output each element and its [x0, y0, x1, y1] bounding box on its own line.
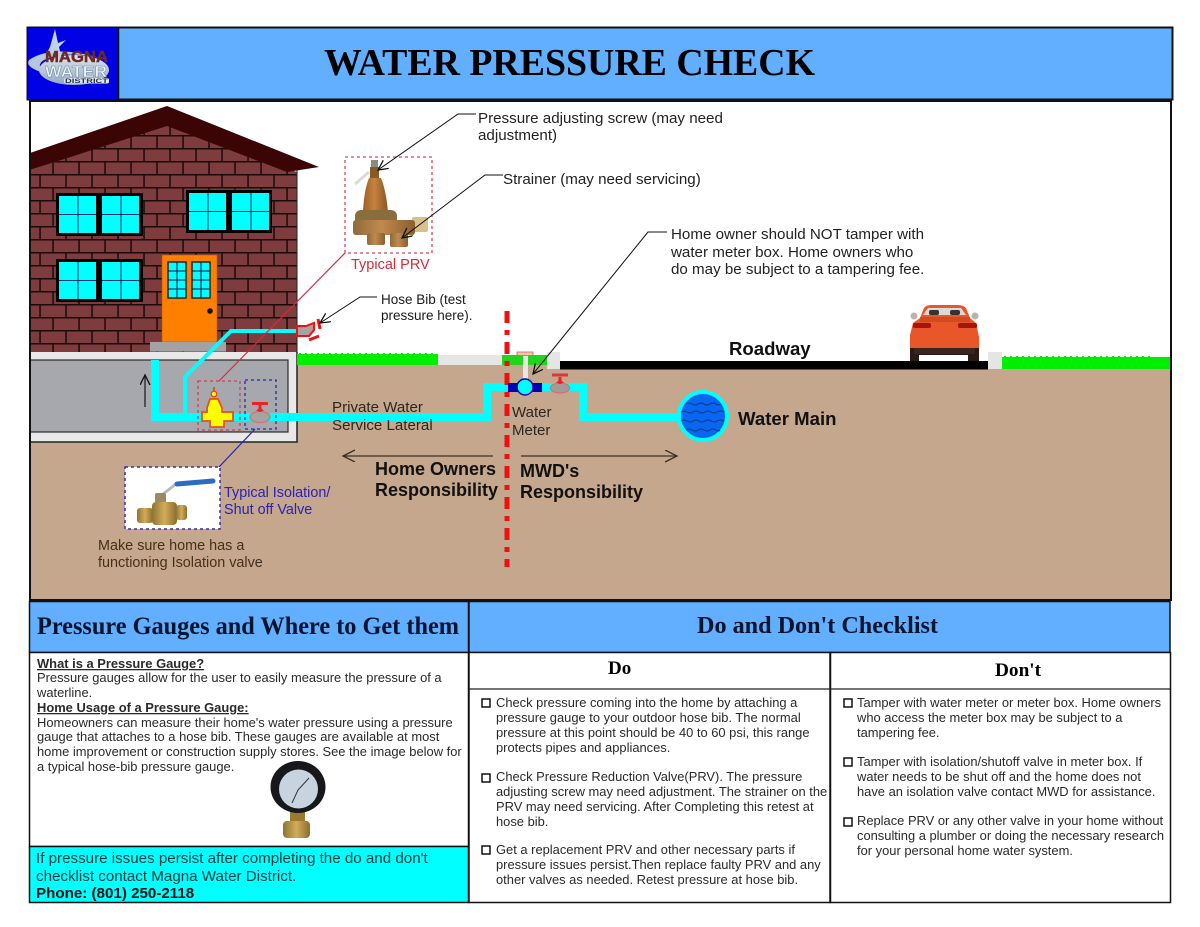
- text block: what is a gauge: What is a Pressure Gauge?: [37, 656, 204, 671]
- logo: WATER: [45, 64, 107, 81]
- roadway: [560, 361, 988, 370]
- label: water meter: Meter: [512, 422, 550, 439]
- column: do: [469, 652, 830, 902]
- callout: do not tamper: [533, 226, 924, 374]
- label: private water service lateral: Service Lateral: [332, 417, 433, 434]
- don't item 3: for your personal home water system.: [857, 843, 1073, 858]
- label: private water service lateral: [332, 399, 433, 434]
- callout: strainer: [402, 171, 701, 238]
- hose bib: [297, 319, 320, 340]
- door step: [150, 342, 226, 352]
- panel: pressure gauges: [30, 602, 468, 902]
- label: water meter: [512, 404, 551, 439]
- window lower left: [56, 259, 143, 302]
- checklist item 2: PRV may need servicing. After Completing this retest at: [496, 799, 814, 814]
- callout: hose bib: pressure here).: [381, 308, 473, 323]
- valve photo: [353, 160, 428, 247]
- logo: [28, 28, 119, 99]
- checklist item 1: [482, 695, 810, 755]
- title: WATER PRESSURE CHECK: [324, 42, 815, 84]
- don't item 3: Replace PRV or any other valve in your home without: [857, 813, 1164, 828]
- PRV photo panel: [345, 157, 432, 273]
- basement: [30, 352, 297, 442]
- text block: what is a gauge: Pressure gauges allow for the user to easily measure the pressure of a: [37, 670, 442, 685]
- column: do: Do: [608, 658, 631, 679]
- callout: contact: [30, 846, 468, 902]
- don't item 2: water needs to be shut off and the home does not: [856, 769, 1141, 784]
- icon: isolation valve symbol: [250, 402, 270, 422]
- label: MWD responsibility: MWD's: [520, 461, 579, 481]
- grass and curb right: [988, 352, 1170, 369]
- don't item 3: [844, 813, 1164, 858]
- callout: hose bib: [320, 292, 473, 323]
- don't item 2: have an isolation valve contact MWD for assistance.: [857, 784, 1155, 799]
- don't item 1: tampering fee.: [857, 725, 940, 740]
- PRV label: Typical PRV: [351, 257, 430, 273]
- callout: adjusting screw: Pressure adjusting screw (may need: [478, 110, 723, 127]
- callout: contact: Phone: (801) 250-2118: [36, 885, 194, 902]
- don't item 3: consulting a plumber or doing the necessary research: [857, 828, 1164, 843]
- checklist item 3: [482, 842, 821, 887]
- grass and sidewalk left of meter: [297, 352, 560, 369]
- checklist item 1: protects pipes and appliances.: [496, 740, 670, 755]
- isolation valve label: [224, 485, 330, 518]
- door: [162, 255, 217, 342]
- don't item 2: [844, 754, 1155, 799]
- callout: do not tamper: water meter box. Home owners who: [670, 244, 913, 261]
- heading: pressure gauges: [30, 602, 468, 652]
- icon: meter valve: [550, 374, 570, 393]
- callout: do not tamper: Home owner should NOT tamper with: [671, 226, 924, 243]
- label: water meter: Water: [512, 404, 551, 421]
- checklist item 2: adjusting screw may need adjustment. The strainer on the: [496, 784, 827, 799]
- don't item 1: Tamper with water meter or meter box. Home owners: [857, 695, 1161, 710]
- panel: do and don't checklist: [469, 602, 1170, 902]
- icon: PRV symbol: [202, 387, 233, 427]
- isolation valve label: Shut off Valve: [224, 502, 312, 518]
- isolation valve note: [98, 538, 263, 571]
- checklist item 3: pressure issues persist.Then replace faulty PRV and any: [496, 857, 821, 872]
- checklist item 1: pressure at this point should be 40 to 60 psi, this range: [496, 725, 810, 740]
- arrow: basement up: [144, 375, 146, 407]
- label: MWD responsibility: Responsibility: [520, 482, 643, 502]
- don't item 1: [844, 695, 1161, 740]
- ground: [30, 365, 1170, 600]
- pipes: [155, 331, 682, 417]
- house: [30, 106, 319, 352]
- isolation box dashed: [219, 380, 276, 467]
- window upper left: [56, 193, 143, 236]
- panel frame: [30, 101, 1171, 600]
- isolation valve photo panel: [125, 467, 220, 529]
- label: home owners responsibility: Responsibility: [375, 480, 498, 500]
- icon: pressure gauge: [270, 761, 326, 838]
- column: don't: [830, 652, 1170, 902]
- water meter: [508, 352, 542, 395]
- checklist item 3: other valves as needed. Retest pressure at hose bib.: [496, 872, 798, 887]
- isolation valve label: Typical Isolation/: [224, 485, 330, 501]
- arrow: home owners: [343, 455, 493, 457]
- label: water main: Water Main: [738, 408, 836, 429]
- callout: hose bib: Hose Bib (test: [381, 292, 466, 307]
- ball valve photo: [137, 481, 213, 525]
- callout: contact: checklist contact Magna Water District.: [36, 868, 296, 885]
- isolation valve note: functioning Isolation valve: [98, 555, 263, 571]
- water main: [679, 392, 727, 440]
- text block: what is a gauge: home improvement or construction supply stores. See the image below for: [37, 744, 462, 759]
- callout: contact: If pressure issues persist after completing the do and don't: [36, 850, 429, 867]
- checklist item 3: Get a replacement PRV and other necessary parts if: [496, 842, 795, 857]
- label: private water service lateral: Private Water: [332, 399, 423, 416]
- text block: what is a gauge: gauge that attaches to a hose bib. These gauges are available at most: [37, 729, 440, 744]
- responsibility boundary: [504, 311, 510, 567]
- car: [910, 305, 979, 361]
- text block: what is a gauge: waterline.: [36, 685, 92, 700]
- callout: do not tamper: do may be subject to a tampering fee.: [671, 261, 924, 278]
- panel: service line diagram: [30, 101, 1171, 600]
- label: roadway: Roadway: [729, 338, 811, 359]
- window upper right: [186, 190, 272, 233]
- callout: adjusting screw: [378, 110, 723, 170]
- arrow: MWD: [521, 455, 677, 457]
- text block: what is a gauge: Home Usage of a Pressure Gauge:: [37, 700, 249, 715]
- checklist item 2: [482, 769, 827, 829]
- heading: checklist: Do and Don't Checklist: [697, 613, 938, 639]
- roof: [30, 106, 319, 172]
- header banner: [28, 28, 1172, 100]
- label: home owners responsibility: [375, 459, 498, 500]
- PRV box dashed: [198, 252, 346, 430]
- heading: checklist: [469, 602, 1170, 652]
- text block: what is a gauge: [36, 656, 462, 774]
- text block: what is a gauge: Homeowners can measure their home's water pressure using a pressure: [37, 715, 453, 730]
- logo: MAGNA: [45, 49, 108, 66]
- checklist item 2: Check Pressure Reduction Valve(PRV). The pressure: [496, 769, 802, 784]
- column: don't: Don't: [995, 660, 1042, 681]
- don't item 1: who access the meter box may be subject to a: [856, 710, 1123, 725]
- label: home owners responsibility: Home Owners: [375, 459, 496, 479]
- callout: adjusting screw: adjustment): [478, 127, 557, 144]
- callout: strainer: Strainer (may need servicing): [503, 171, 701, 188]
- label: MWD responsibility: [520, 461, 643, 502]
- checklist item 1: pressure gauge to your outdoor hose bib. The normal: [496, 710, 801, 725]
- checklist item 2: hose bib.: [496, 814, 548, 829]
- isolation valve note: Make sure home has a: [98, 538, 244, 554]
- text block: what is a gauge: a typical hose-bib pressure gauge.: [37, 759, 234, 774]
- logo: DISTRICT: [65, 78, 108, 85]
- don't item 2: Tamper with isolation/shutoff valve in meter box. If: [857, 754, 1143, 769]
- heading: pressure gauges: Pressure Gauges and Where to Get them: [37, 613, 459, 640]
- checklist item 1: Check pressure coming into the home by attaching a: [496, 695, 798, 710]
